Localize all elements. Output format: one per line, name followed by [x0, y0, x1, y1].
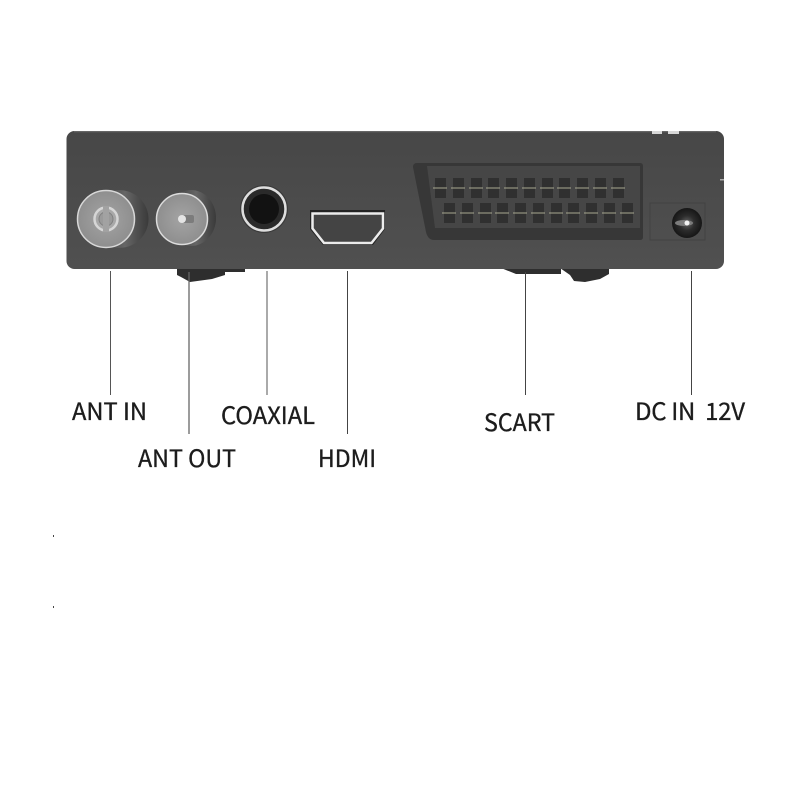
top notch highlight — [652, 131, 679, 134]
leader line: ANT OUT — [188, 272, 190, 434]
label: DC IN 12V: DC IN 12V — [635, 392, 745, 427]
scart pins: top row — [435, 178, 624, 198]
leader line: COAXIAL — [266, 271, 268, 395]
label: SCART: SCART — [484, 403, 555, 438]
port: ANT OUT — [156, 190, 216, 246]
leader line: HDMI — [346, 271, 348, 434]
top edge highlight — [74, 131, 716, 133]
stray dot marks — [53, 535, 54, 608]
port: SCART — [413, 163, 643, 240]
scart pin highlights: top row — [433, 187, 625, 189]
port: ANT IN — [78, 190, 148, 248]
label: COAXIAL: COAXIAL — [221, 396, 315, 431]
leader line: ANT IN — [110, 271, 112, 395]
leader line: DC IN — [690, 271, 692, 395]
leader line: SCART — [524, 272, 526, 395]
device rear panel — [66, 131, 724, 269]
scart pin highlights: bottom row — [442, 212, 634, 214]
label: HDMI: HDMI — [318, 439, 376, 474]
port: HDMI — [310, 210, 385, 245]
device feet — [177, 268, 609, 282]
label: ANT IN: ANT IN — [72, 392, 147, 427]
port: COAXIAL — [240, 185, 288, 233]
port: DC IN — [650, 203, 705, 240]
side mark — [720, 179, 724, 180]
label: ANT OUT: ANT OUT — [138, 439, 236, 474]
scart pins: bottom row — [444, 203, 633, 223]
